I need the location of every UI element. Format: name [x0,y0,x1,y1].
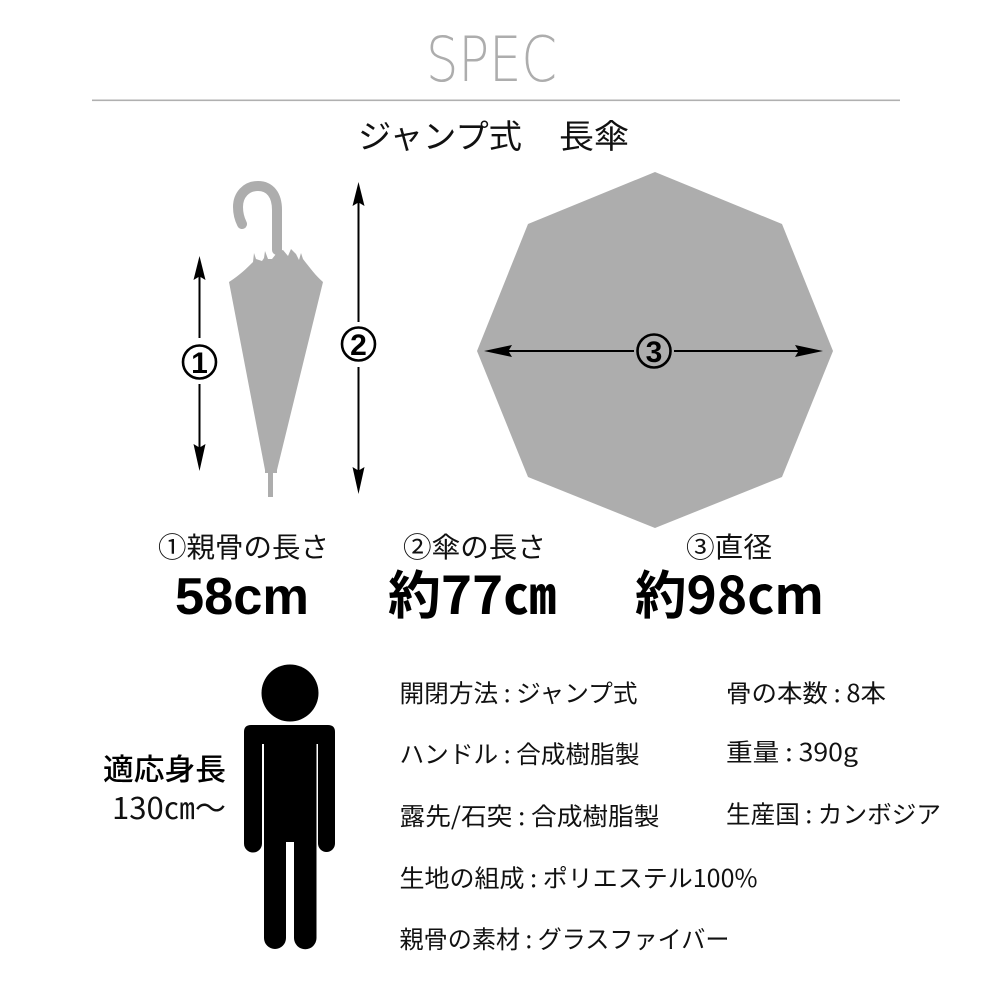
arrow: rib length 1 [183,256,216,471]
icon: closed umbrella [229,186,323,497]
measurement: rib length: ①親骨の長さ [158,526,329,566]
measurement: diameter: ③直径 [686,526,772,566]
spec list left: 生地の組成 : ポリエステル100% [400,860,758,895]
text: suitable height: 適応身長 [103,745,226,789]
arrow: rib length 1: 1 [191,347,208,380]
spec list left: ハンドル : 合成樹脂製 [400,736,640,771]
text: suitable height [103,745,226,828]
title: SPEC: SPEC [426,23,557,96]
measurement: umbrella length: ②傘の長さ [403,526,546,566]
subtitle: jump-type long umbrella: ジャンプ式 [358,110,522,158]
spec list left: 親骨の素材 : グラスファイバー [400,921,730,956]
measurement: umbrella length: 約77㎝ [388,554,556,629]
spec list left [400,675,758,956]
measurement: rib length: 58cm [175,568,309,626]
spec list left: 開閉方法 : ジャンプ式 [400,675,638,710]
arrow: umbrella length 2 [342,182,375,494]
icon: person [244,664,335,949]
spec list right: 重量 : 390g [726,734,858,769]
spec list left: 露先/石突 : 合成樹脂製 [400,798,660,833]
arrow: diameter 3: 3 [646,336,662,369]
subtitle: jump-type long umbrella: 長傘 [559,110,629,158]
text: suitable height: 130㎝～ [112,784,226,828]
measurement: rib length [158,526,329,626]
spec list right [726,675,941,831]
subtitle: jump-type long umbrella [358,110,629,158]
icon: open umbrella octagon [477,172,833,528]
arrow: diameter 3 [484,334,823,369]
measurement: diameter: 約98cm [635,554,824,629]
spec list right: 骨の本数 : 8本 [726,675,886,710]
arrow: umbrella length 2: 2 [350,329,367,362]
spec list right: 生産国 : カンボジア [726,796,941,831]
